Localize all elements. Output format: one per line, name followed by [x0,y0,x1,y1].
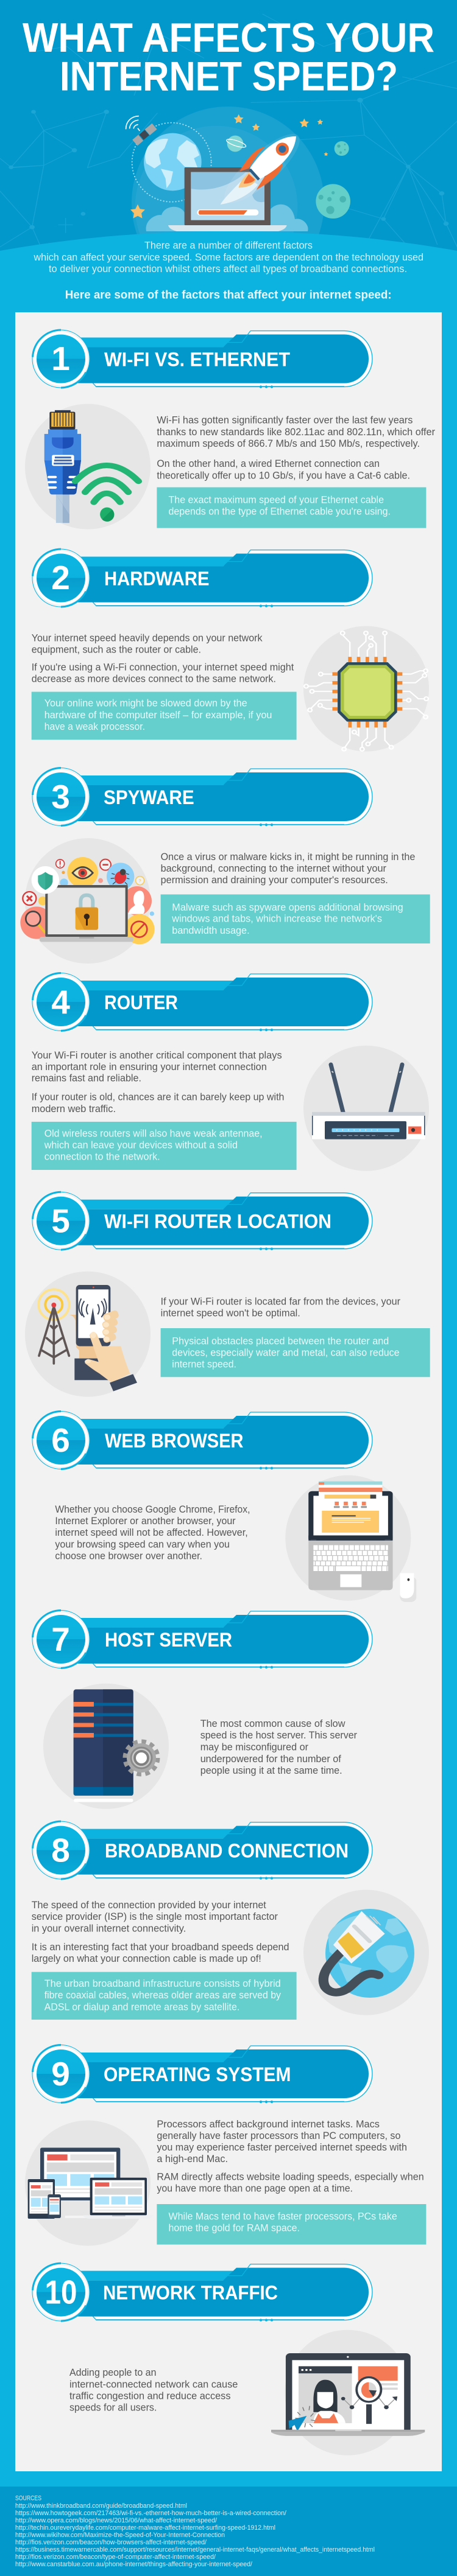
sources list: SOURCES [15,2495,41,2502]
title [23,15,434,100]
section 2 callout: hardware of the computer itself – for example, if you [44,710,272,721]
section 7 text: underpowered for the number of [200,1754,341,1765]
section 8 callout: ADSL or dialup and remote areas by satellite. [44,2001,239,2012]
section 4 header [32,973,372,1031]
section 1 text: thanks to new standards like 802.11ac and 802.11n, which offer [157,427,435,438]
section 4 text: remains fast and reliable. [32,1073,141,1084]
section 2 header: HARDWARE [104,567,210,589]
clouds [146,205,308,231]
section 3 header: 3 [51,778,70,816]
section 3 text: permission and draining your computer's resources. [161,875,388,886]
section 3 callout: Malware such as spyware opens additional browsing [172,902,403,913]
sources list: https://www.howtogeek.com/217463/wi-fi-vs.-ethernet-how-much-better-is-a-wired-connection/ [15,2510,286,2517]
section 3 callout: windows and tabs, which increase the network's [171,914,382,925]
section 9 header [32,2045,372,2103]
sources list: http://techin.oureverydaylife.com/computer-malware-affect-internet-surfing-speed-1912.html [15,2524,275,2532]
section 1 header: WI-FI VS. ETHERNET [104,348,290,370]
section 7 header: HOST SERVER [105,1629,232,1651]
section 3: Spyware [20,768,430,964]
section 2 header [32,549,372,607]
section 5 callout: Physical obstacles placed between the router and [172,1335,389,1346]
section 4 callout: which can leave your devices without a solid [44,1139,238,1150]
section 8: Broadband connection [32,1821,429,2020]
section 2 text: decrease as more devices connect to the same network. [32,673,276,684]
section 6 text: Whether you choose Google Chrome, Firefox, [55,1504,250,1515]
section 9 text [157,2119,424,2194]
icon: responsive devices [25,2121,154,2246]
section 2 callout: Your online work might be slowed down by the [44,698,247,709]
intro paragraph: There are a number of different factors [144,240,313,251]
section 10 text: Adding people to an [69,2367,156,2378]
sources list: http://fios.verizon.com/beacon/how-browsers-affect-internet-speed/ [15,2539,207,2546]
intro paragraph: which can affect your service speed. Some factors are dependent on the technology used [34,252,423,263]
section 9 text: generally have faster processors than PC computers, so [157,2130,400,2141]
section 8 callout: fibre coaxial cables, whereas older areas are served by [44,1990,282,2001]
section 3 header: SPYWARE [104,786,194,808]
section 9 text: you may experience faster perceived internet speeds with [157,2142,407,2153]
section 8 callout [32,1972,297,2020]
section 5 header: 5 [51,1202,70,1239]
section 7 text: The most common cause of slow [200,1718,345,1729]
section 7: Host server [32,1611,372,1809]
stars [130,114,328,219]
intro paragraph [34,240,423,275]
section 4 text: Your Wi-Fi router is another critical component that plays [32,1050,282,1061]
section 10: Network traffic [32,2263,425,2455]
icon: globe with network plug [303,1890,429,2015]
sources list: https://business.timewarnercable.com/support/resources/internet/general-internet-faqs/general/what_affects_internetspeed.html [15,2546,375,2553]
section 1 text [157,415,435,481]
section 2 text: If you're using a Wi-Fi connection, your internet speed might [32,662,294,673]
icon: ethernet cable and Wi-Fi [25,404,151,530]
section 10 text: speeds for all users. [69,2403,157,2413]
section 6 header: 6 [51,1421,70,1459]
section 5 header [32,1192,372,1250]
rocket [216,125,308,212]
sources list: http://www.thinkbroadband.com/guide/broadband-speed.html [15,2502,187,2510]
icon: laptop with web page and mouse [285,1475,416,1602]
section 8 text: service provider (ISP) is the single most important factor [32,1911,278,1922]
section 4 text: modern web traffic. [32,1104,116,1115]
background network pattern [0,14,457,247]
intro subheading: Here are some of the factors that affect your internet speed: [65,289,392,302]
section 1 text: Wi-Fi has gotten significantly faster over the last few years [157,415,413,426]
section 2 callout [32,691,297,740]
section 2: Hardware [32,549,429,751]
section 1 callout [157,487,426,528]
laptop [168,167,287,231]
footer band [0,2487,457,2576]
section 3 callout: bandwidth usage. [172,925,250,936]
section 2 text [32,633,294,684]
section 8 header: BROADBAND CONNECTION [105,1840,349,1862]
section 9 header: OPERATING SYSTEM [104,2063,291,2085]
section 4 callout: connection to the network. [44,1152,160,1163]
section 3 text [161,852,415,886]
section 1 header: 1 [51,340,70,377]
section 1 text: On the other hand, a wired Ethernet connection can [157,458,380,469]
main content panel [15,312,442,645]
section 2 callout: have a weak processor. [44,721,145,732]
section 4 text: an important role in ensuring your internet connection [32,1062,267,1073]
section 2 header: 2 [51,559,70,597]
main content panel body [15,645,442,2471]
section 4 header: ROUTER [104,992,178,1013]
section 5 header: WI-FI ROUTER LOCATION [104,1211,331,1233]
section 10 text: internet-connected network can cause [69,2379,238,2390]
section 7 text [200,1718,357,1776]
icon: processor chip [303,626,429,751]
section 9 callout: home the gold for RAM space. [168,2223,300,2234]
sources list: http://fios.verizon.com/beacon/type-of-computer-affect-internet-speed/ [15,2553,216,2561]
section 5: Wi-Fi router location [25,1192,430,1397]
section 2 text: equipment, such as the router or cable. [32,645,201,656]
section 5 callout: internet speed. [172,1359,236,1370]
section 6 text: choose one browser over another. [55,1551,202,1562]
section 9 header: 9 [51,2055,70,2093]
section 1 callout: The exact maximum speed of your Ethernet cable [168,495,384,506]
section 5 text: internet speed won't be optimal. [161,1307,300,1318]
section 10 header: NETWORK TRAFFIC [103,2282,278,2304]
section 1 text: theoretically offer up to 10 Gb/s, if you have a Cat-6 cable. [157,470,410,481]
section 9 text: you have more than one page open at a time. [157,2183,353,2194]
section 1: Wi-Fi vs. Ethernet [25,330,435,530]
planets [225,136,350,219]
section 6 text: your browsing speed can vary when you [55,1539,230,1550]
section 5 callout: devices, especially water and metal, can also reduce [172,1348,400,1359]
section 3 header [32,768,372,826]
section 10 header [32,2263,372,2322]
section 7 header [32,1611,372,1668]
section 2 text: Your internet speed heavily depends on your network [32,633,263,644]
section 9 callout: While Macs tend to have faster processors, PCs take [168,2211,397,2222]
section 4 callout [32,1122,297,1170]
section 10 text [69,2367,238,2413]
icon: locked laptop and malware symbols: ? [138,878,141,883]
section 4 callout: Old wireless routers will also have weak antennae, [44,1128,263,1139]
section 3 text: Once a virus or malware kicks in, it might be running in the [161,852,415,863]
section 9 text: Processors affect background internet tasks. Macs [157,2119,380,2130]
dome behind illustration [132,107,324,299]
intro paragraph: to deliver your connection whilst others affect all types of broadband connections. [49,264,407,275]
hero illustration: laptop, rocket, globe and planets [126,107,350,299]
section 9 callout [157,2204,426,2245]
icon: server rack with gear [43,1684,169,1809]
sources list: http://www.wikihow.com/Maximize-the-Speed-of-Your-Internet-Connection [15,2532,225,2539]
section 10 header: 10 [45,2273,77,2311]
icon: Wi-Fi router [303,1046,429,1171]
section 4 header: 4 [51,983,70,1021]
globe [144,133,202,191]
section 4: Router [32,973,429,1171]
section 8 header [32,1821,372,1880]
icon: phone, hand and signal tower [25,1272,151,1397]
icon: laptop with analytics and user [271,2330,425,2455]
section 7 text: people using it at the same time. [200,1765,342,1776]
section 9 text: a high-end Mac. [157,2154,228,2165]
section 9 text: RAM directly affects website loading speeds, especially when [157,2171,424,2182]
section 1 text: maximum speeds of 866.7 Mb/s and 150 Mb/s, respectively. [157,438,420,449]
sources list [15,2495,375,2568]
section 6 text: internet speed will not be affected. However, [55,1527,248,1538]
section 5 text: If your Wi-Fi router is located far from the devices, your [161,1296,400,1307]
section 3 callout [161,894,430,943]
sources list: http://www.opera.com/blogs/news/2015/06/what-affect-internet-speed/ [15,2517,217,2524]
section 4 text [32,1050,284,1115]
satellite [126,116,157,145]
sources list: http://www.canstarblue.com.au/phone-internet/things-affecting-your-internet-speed/ [15,2561,252,2568]
section 6 text: Internet Explorer or another browser, your [55,1516,236,1527]
section 1 header [32,330,372,388]
section 7 text: may be misconfigured or [200,1741,308,1752]
section 10 text: traffic congestion and reduce access [69,2390,230,2401]
section 8 text: It is an interesting fact that your broadband speeds depend [32,1942,289,1953]
section 7 header: 7 [51,1620,70,1658]
section 8 header: 8 [51,1832,70,1869]
section 8 callout: The urban broadband infrastructure consists of hybrid [44,1978,281,1989]
section 8 text: The speed of the connection provided by your internet [32,1900,266,1911]
section 7 text: speed is the host server. This server [200,1730,357,1741]
section 6: Web browser [32,1411,416,1602]
dotted orbit [132,123,211,202]
section 8 text: largely on what your connection cable is made up of! [32,1953,261,1964]
section 5 text [161,1296,400,1318]
section 6 text [55,1504,250,1562]
title: INTERNET SPEED? [60,54,398,100]
section 6 header [32,1411,372,1469]
section 1 callout: depends on the type of Ethernet cable you're using. [168,506,391,517]
section 4 text: If your router is old, chances are it can barely keep up with [32,1092,284,1103]
section 8 text: in your overall internet connectivity. [32,1923,186,1934]
section 6 header: WEB BROWSER [105,1430,244,1452]
section 3 text: background, connecting to the internet without your [161,863,386,874]
icon: locked laptop and malware symbols [20,838,155,964]
section 5 callout [161,1328,430,1377]
section 9: Operating system [25,2045,426,2246]
section 8 text [32,1900,289,1964]
